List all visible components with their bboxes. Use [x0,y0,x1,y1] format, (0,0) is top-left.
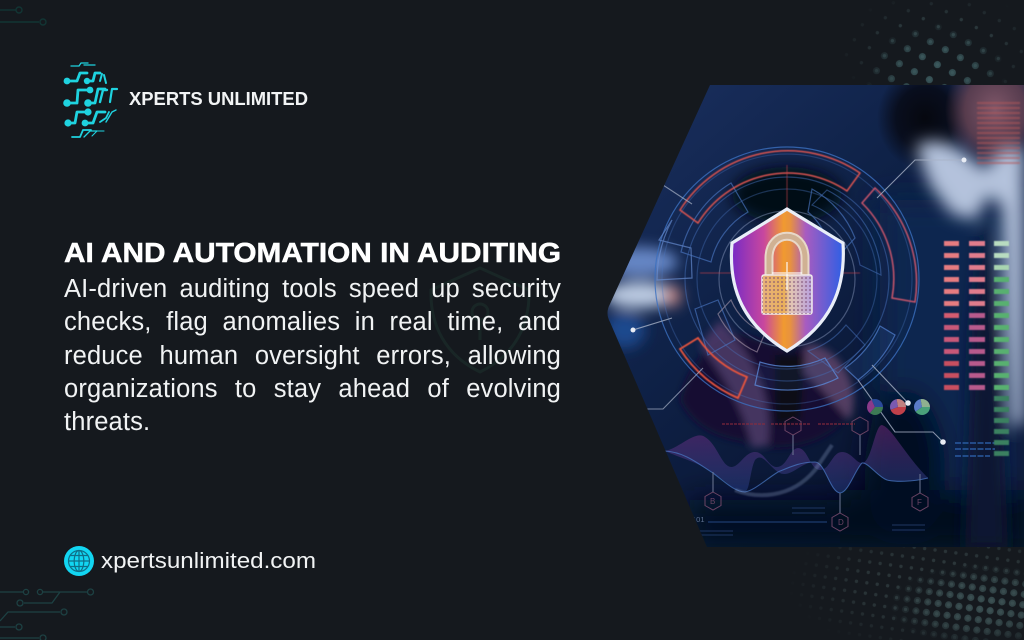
hand [680,320,854,448]
website link [64,546,316,576]
red text dashes [722,423,855,425]
body text: threats. [64,408,150,436]
body text: reduce human oversight errors, allowing [64,342,561,370]
icon: globe [64,546,94,576]
chart label row: 101 [692,515,705,524]
dark hub behind shield [732,167,842,223]
bars column 3 [994,241,1009,456]
blurred foreground highlights [602,247,681,348]
logo: circuit globe and company name [63,63,308,137]
body text: checks, flag anomalies in real time, and [64,308,561,336]
red data stripes [977,103,1020,163]
flare lines [700,165,860,273]
lock icon [762,236,812,314]
level bars [944,241,1009,456]
hexagon markers: F [917,498,922,507]
circuit lines: top left [0,7,46,25]
chart label row [692,508,925,535]
body text: organizations to stay ahead of evolving [64,375,561,403]
hexagon markers [705,417,928,531]
icon: circuit globe [63,63,117,137]
hexagon markers: B [710,497,715,506]
wave chart [665,425,928,495]
heading: AI AND AUTOMATION IN AUDITING [64,237,561,268]
dot pattern: top right [853,2,1023,85]
hexagon markers: D [838,518,844,527]
blurred person: suit, collar and tie [690,52,1024,550]
faint background shield [431,268,529,372]
website address: xpertsunlimited.com [101,548,316,573]
shield with lock [731,209,843,351]
bars column 2 [969,241,985,390]
hexagon image: cybersecurity shield [600,52,1024,550]
image background [600,85,1024,548]
red segments [680,151,917,398]
pie charts [871,403,926,411]
dashboard rings [655,147,919,411]
small legend text lines [955,443,995,456]
bars column 1 [944,241,959,390]
body text: AI-driven auditing tools speed up security [64,275,561,303]
shield [731,209,843,351]
dot pattern: bottom right [812,547,1024,640]
circuit lines: bottom left [0,589,94,640]
body text [64,275,561,436]
callout lines with nodes [630,158,966,445]
company name: XPERTS UNLIMITED [129,88,308,109]
